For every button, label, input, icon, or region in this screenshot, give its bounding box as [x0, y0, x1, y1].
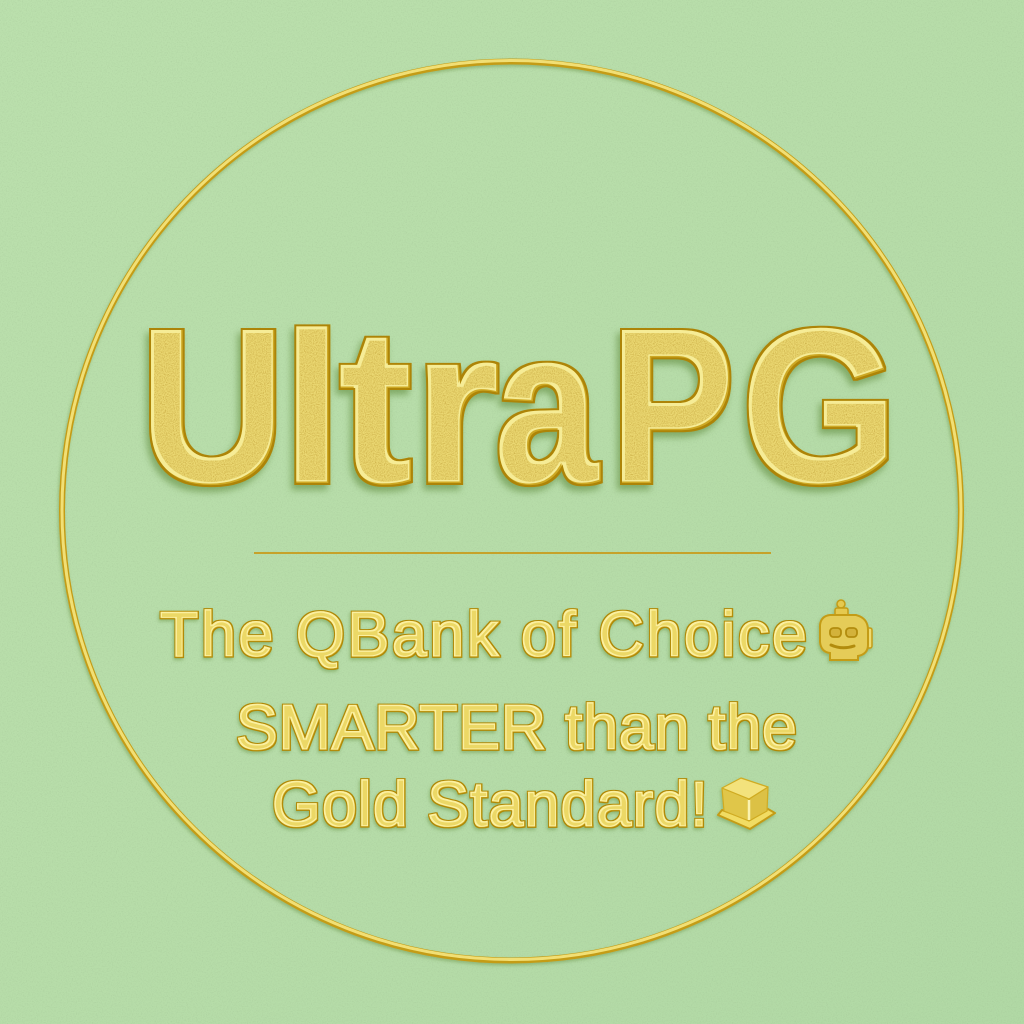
title: UltraPG: ltr: [283, 286, 499, 528]
icon: gold cube: [718, 778, 775, 829]
title: UltraPG: G: [742, 285, 898, 528]
title: UltraPG: aP: [495, 284, 734, 528]
divider line: [254, 552, 771, 554]
subtitle line 1: The QBank of Choice: [160, 600, 807, 670]
gold circle ring: [62, 60, 961, 960]
title: UltraPG: U: [140, 285, 285, 528]
title: UltraPG: [140, 284, 898, 528]
subtitle line 2: SMARTER than the: [236, 693, 797, 763]
subtitle: [160, 600, 807, 840]
icon: robot head: [820, 600, 872, 660]
subtitle line 3: Gold Standard!: [272, 770, 708, 840]
